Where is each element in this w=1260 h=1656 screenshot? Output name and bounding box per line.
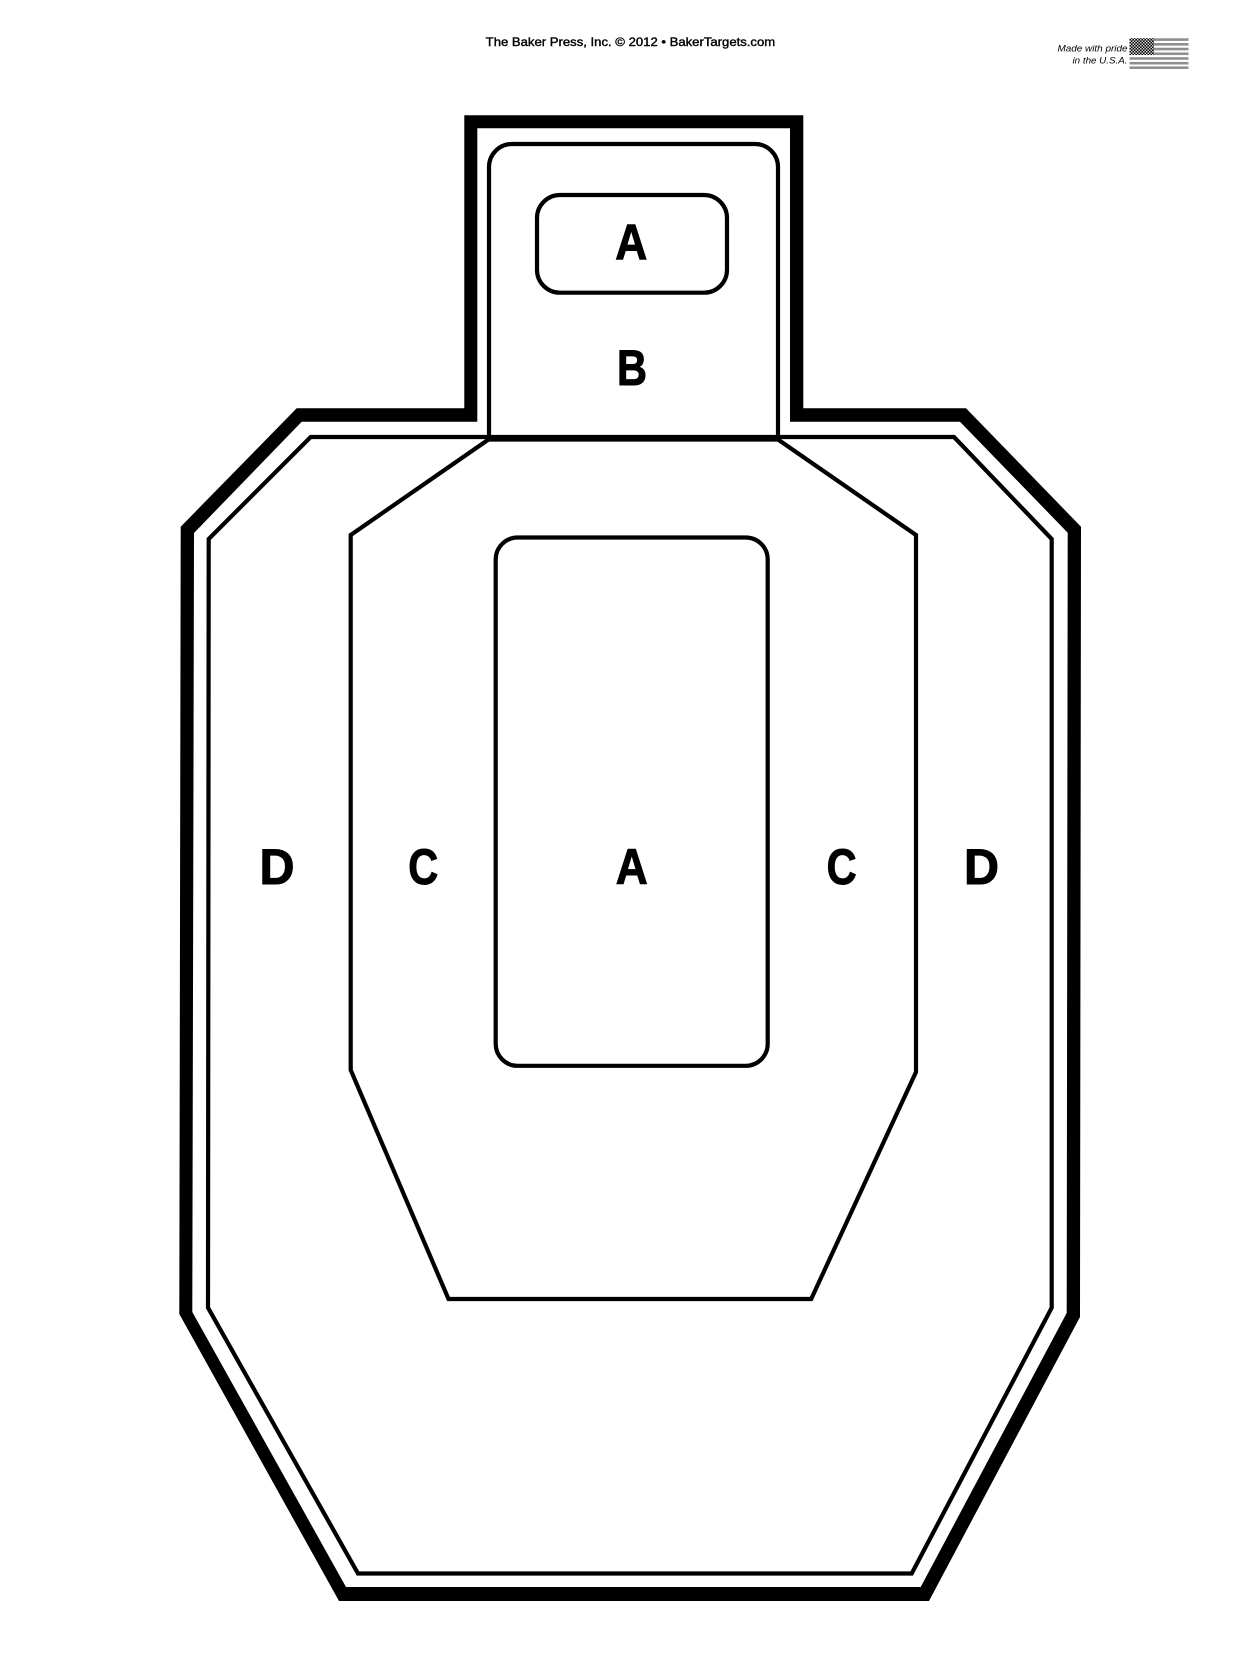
badge text: in the U.S.A. — [1072, 55, 1128, 66]
zone D: thin body outline — [208, 437, 1052, 1574]
letter A body: A — [616, 839, 648, 895]
zone letters — [260, 214, 999, 895]
letter D right: D — [964, 839, 999, 895]
zone B: head box — [489, 144, 778, 440]
letter D left: D — [260, 839, 294, 895]
badge text: Made with pride — [1058, 44, 1128, 55]
zone C: body outline — [351, 440, 916, 1299]
header: copyright line: The Baker Press, Inc. © 2012 • BakerTargets.com — [486, 35, 775, 49]
icon: American flag — [1130, 38, 1188, 69]
letter A head: A — [615, 214, 647, 270]
target outline: thick outer border — [179, 115, 1081, 1601]
badge text — [1058, 44, 1128, 66]
letter C right: C — [827, 839, 857, 895]
letter C left: C — [408, 839, 438, 895]
letter B head: B — [617, 340, 647, 396]
zone A: head box — [537, 195, 727, 293]
zone A: body box — [496, 538, 768, 1066]
badge: made in USA — [1058, 38, 1188, 69]
